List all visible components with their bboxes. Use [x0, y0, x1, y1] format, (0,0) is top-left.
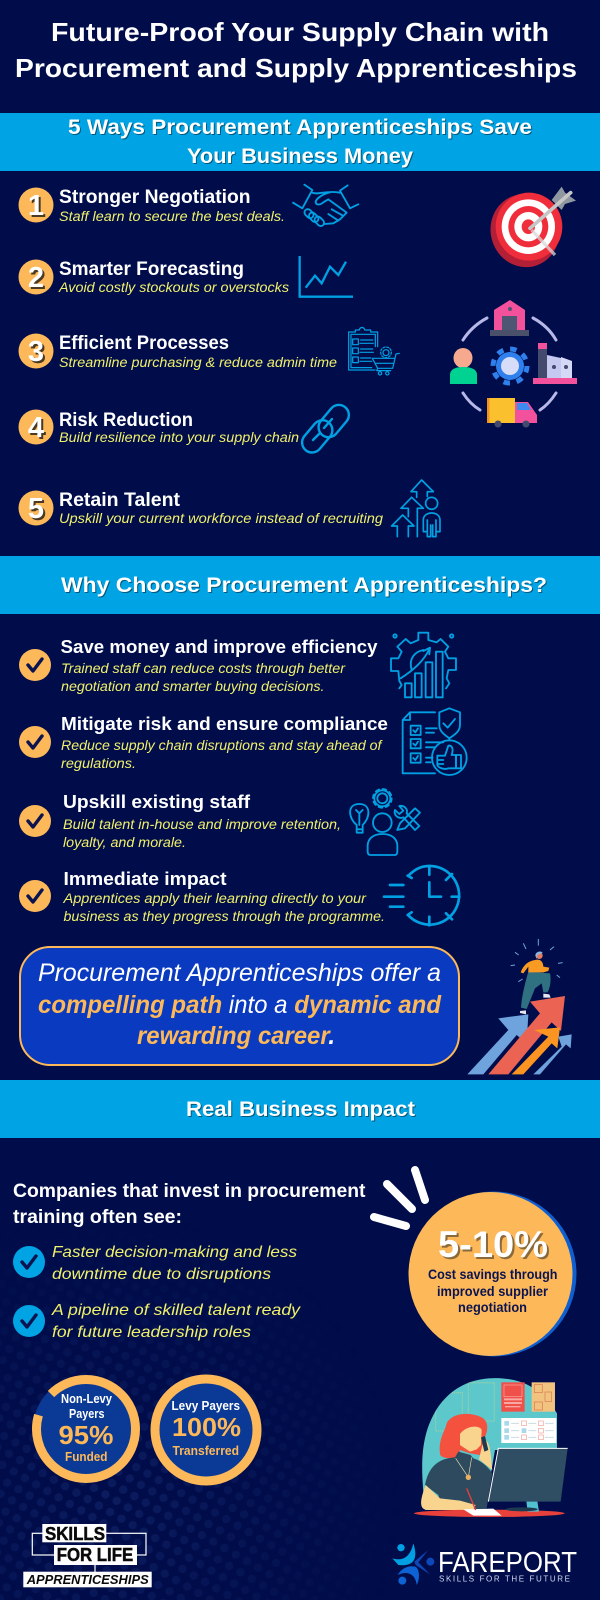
list item 2: smarter forecasting: 2	[28, 262, 44, 294]
list item 2: smarter forecasting	[18, 259, 289, 295]
list item 4: risk reduction	[18, 410, 299, 445]
benefit: mitigate risk: Reduce supply chain disruptions and stay ahead of	[61, 738, 383, 753]
callout: compelling path: compelling path into a dynamic and	[38, 991, 442, 1019]
illustration: woman on phone at desk	[414, 1378, 568, 1517]
bullet: faster decision-making: downtime due to disruptions	[52, 1266, 271, 1283]
gear	[493, 349, 527, 383]
list item 1: stronger negotiation: 1	[28, 190, 44, 222]
list item 4: risk reduction: Build resilience into your supply chain	[59, 430, 299, 445]
logo: skills for life apprenticeships: APPRENTICESHIPS	[26, 1572, 149, 1587]
burst lines	[374, 1170, 425, 1226]
stat ring: non-levy payers: Non-Levy	[61, 1392, 112, 1406]
list item 5: retain talent: Retain Talent	[59, 490, 181, 511]
title	[15, 17, 577, 83]
benefit: upskill staff: Upskill existing staff	[63, 791, 251, 812]
logo: fareport: FAREPORT	[438, 1547, 577, 1579]
factory	[533, 343, 577, 384]
section banner: why choose	[0, 556, 600, 614]
logo: fareport	[392, 1543, 577, 1585]
list item 1: stronger negotiation: Staff learn to secure the best deals.	[59, 209, 285, 224]
benefit: mitigate risk: regulations.	[61, 756, 136, 771]
heading: companies that invest: training often see:	[13, 1207, 182, 1228]
logo: skills for life apprenticeships: SKILLS	[45, 1524, 105, 1544]
heading: companies that invest	[13, 1181, 366, 1228]
list item 5: retain talent: 5	[28, 493, 44, 525]
callout: 5-10% cost savings	[374, 1170, 576, 1356]
icon: clipboard with cart	[349, 327, 399, 375]
logo: fareport: SKILLS FOR THE FUTURE	[439, 1574, 570, 1584]
logo: skills for life apprenticeships: FOR LIFE	[57, 1545, 133, 1565]
section banner: why choose: Why Choose Procurement Apprenticeships?	[61, 574, 547, 597]
list item 1: stronger negotiation	[18, 187, 285, 224]
callout: 5-10% cost savings: Cost savings through	[428, 1267, 558, 1282]
stat ring: levy payers: Levy Payers	[172, 1399, 240, 1413]
list item 3: efficient processes	[18, 333, 337, 370]
section banner: real business impact: Real Business Impact	[186, 1098, 415, 1121]
benefit: upskill staff	[19, 791, 341, 850]
illustration: target with arrow	[482, 186, 576, 275]
list item 3: efficient processes: Efficient Processes	[59, 333, 229, 354]
stat ring: levy payers: 100%	[172, 1412, 241, 1442]
icon: gear with bars	[391, 633, 456, 697]
list item 2: smarter forecasting: Avoid costly stockouts or overstocks	[58, 280, 289, 295]
callout: 5-10% cost savings: 5-10%	[438, 1224, 548, 1265]
list item 5: retain talent: Upskill your current workforce instead of recruiting	[59, 511, 384, 526]
callout: 5-10% cost savings: improved supplier	[437, 1284, 549, 1299]
icon: handshake	[293, 185, 358, 227]
stat ring: levy payers	[155, 1379, 257, 1481]
stat ring: non-levy payers: Funded	[65, 1450, 108, 1464]
benefit: save money: negotiation and smarter buying decisions.	[61, 679, 324, 694]
heading: companies that invest: Companies that invest in procurement	[13, 1181, 366, 1202]
list item 4: risk reduction: Risk Reduction	[59, 410, 193, 431]
icon: line chart	[300, 256, 353, 297]
callout: compelling path	[20, 947, 459, 1065]
benefit: mitigate risk: Mitigate risk and ensure compliance	[61, 713, 388, 734]
list item 4: risk reduction: 4	[28, 412, 44, 444]
stat ring: non-levy payers	[16, 1359, 156, 1499]
section banner: 5 ways: 5 Ways Procurement Apprenticeships Save	[68, 116, 532, 139]
title: Future-Proof Your Supply Chain with	[51, 17, 549, 47]
list item 1: stronger negotiation: Stronger Negotiation	[59, 187, 250, 208]
list item 2: smarter forecasting: Smarter Forecasting	[59, 259, 244, 280]
callout: compelling path: rewarding career.	[137, 1022, 335, 1050]
benefit: immediate impact: business as they progress through the programme.	[64, 909, 385, 924]
illustration: climbing arrows	[467, 939, 572, 1074]
section banner: 5 ways: Your Business Money	[187, 145, 413, 168]
callout: 5-10% cost savings: negotiation	[458, 1300, 527, 1315]
section banner: real business impact	[0, 1080, 600, 1138]
bullet: faster decision-making: Faster decision-making and less	[52, 1244, 297, 1261]
stat ring: non-levy payers: 95%	[58, 1420, 114, 1450]
benefit: mitigate risk	[19, 713, 388, 771]
warehouse	[490, 300, 529, 336]
list item 3: efficient processes: 3	[28, 336, 44, 368]
icon: fast clock	[384, 866, 459, 925]
stat ring: non-levy payers: Payers	[69, 1407, 105, 1421]
icon: person with bulb gear tools	[350, 789, 420, 855]
callout: compelling path: Procurement Apprenticeships offer a	[38, 959, 441, 987]
benefit: immediate impact: Immediate impact	[64, 868, 226, 889]
truck	[487, 398, 537, 428]
logo: skills for life apprenticeships	[23, 1524, 152, 1587]
icon: checklist shield thumb	[403, 708, 467, 775]
benefit: upskill staff: loyalty, and morale.	[63, 835, 186, 850]
bullet: pipeline of talent: for future leadership roles	[52, 1324, 251, 1341]
benefit: immediate impact	[19, 868, 385, 924]
person	[450, 348, 477, 384]
benefit: upskill staff: Build talent in-house and improve retention,	[63, 817, 341, 832]
bullet: pipeline of talent	[13, 1302, 301, 1341]
benefit: save money: Save money and improve efficiency	[60, 636, 378, 657]
list item 3: efficient processes: Streamline purchasing & reduce admin time	[59, 355, 337, 370]
stat ring: levy payers: Transferred	[172, 1444, 239, 1458]
illustration: supply chain cycle	[450, 300, 577, 428]
benefit: save money: Trained staff can reduce costs through better	[61, 661, 346, 676]
title: Procurement and Supply Apprenticeships	[15, 53, 577, 83]
bullet: faster decision-making	[13, 1244, 297, 1283]
icon: arrows and person	[392, 480, 440, 537]
icon: chain link	[298, 401, 353, 457]
section banner: 5 ways	[0, 113, 600, 171]
bullet: pipeline of talent: A pipeline of skilled talent ready	[51, 1302, 301, 1319]
benefit: save money	[19, 636, 378, 694]
list item 5: retain talent	[18, 490, 384, 526]
benefit: immediate impact: Apprentices apply their learning directly to your	[62, 891, 367, 906]
cycle arcs	[463, 318, 556, 410]
